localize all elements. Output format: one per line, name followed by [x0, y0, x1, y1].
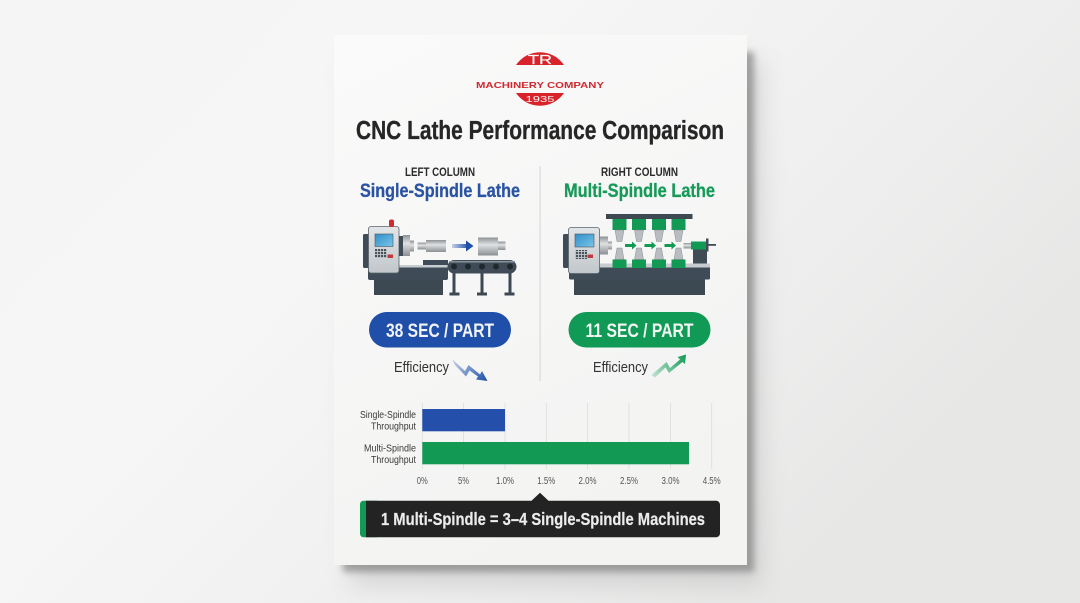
- icon: efficiency up arrow: [652, 354, 686, 378]
- pill: 11 sec per part: [568, 312, 710, 348]
- axis category labels: Multi-Spindle: [364, 444, 416, 454]
- pill: 38 sec per part: 38 SEC / PART: [386, 320, 494, 342]
- logo: TR Machinery Company 1935: TR: [528, 53, 552, 67]
- axis category labels: [360, 410, 416, 466]
- pill: 38 sec per part: [369, 312, 511, 348]
- icon: efficiency down arrow: [452, 359, 488, 381]
- left column label: LEFT COLUMN: [405, 167, 475, 179]
- paper shadow: [343, 52, 762, 586]
- illustration: multi-spindle machine: [563, 214, 716, 295]
- callout: equivalence: 1 Multi-Spindle = 3–4 Single-Spindle Machines: [381, 509, 705, 529]
- illustration: single-spindle machine: [363, 220, 516, 296]
- axis tick labels: 1.0%: [496, 476, 514, 487]
- bar: single-spindle: [422, 409, 505, 431]
- multi-spindle heading: Multi-Spindle Lathe: [564, 180, 715, 202]
- bar: multi-spindle: [422, 442, 689, 464]
- axis tick labels: 2.0%: [578, 476, 597, 487]
- pill: 11 sec per part: 11 SEC / PART: [586, 320, 694, 342]
- axis tick labels: 4.5%: [703, 476, 721, 487]
- axis category labels: Throughput: [371, 455, 416, 466]
- axis category labels: Throughput: [371, 422, 416, 432]
- axis tick labels: 5%: [458, 476, 469, 487]
- efficiency label: Efficiency: [394, 360, 450, 376]
- panel: single-spindle lathe: [360, 167, 520, 381]
- right column label: RIGHT COLUMN: [601, 167, 678, 179]
- axis tick labels: 2.5%: [620, 476, 638, 487]
- single-spindle heading: Single-Spindle Lathe: [360, 180, 520, 202]
- paper sheet: [334, 35, 747, 565]
- logo: TR Machinery Company 1935: MACHINERY COMPANY: [476, 80, 604, 90]
- axis tick labels: 1.5%: [537, 476, 555, 487]
- bar chart: throughput: [360, 403, 721, 487]
- callout: equivalence: [360, 493, 720, 537]
- efficiency label: Efficiency: [593, 360, 649, 376]
- title: CNC Lathe Performance Comparison: [356, 117, 724, 145]
- axis tick labels: 3.0%: [662, 476, 680, 487]
- axis tick labels: 0%: [417, 476, 428, 487]
- axis category labels: Single-Spindle: [360, 410, 416, 421]
- column divider: [540, 166, 541, 381]
- logo: TR Machinery Company 1935: 1935: [526, 94, 555, 104]
- axis tick labels: [417, 476, 721, 487]
- panel: multi-spindle lathe: [563, 167, 716, 378]
- logo: TR Machinery Company 1935: [476, 52, 604, 106]
